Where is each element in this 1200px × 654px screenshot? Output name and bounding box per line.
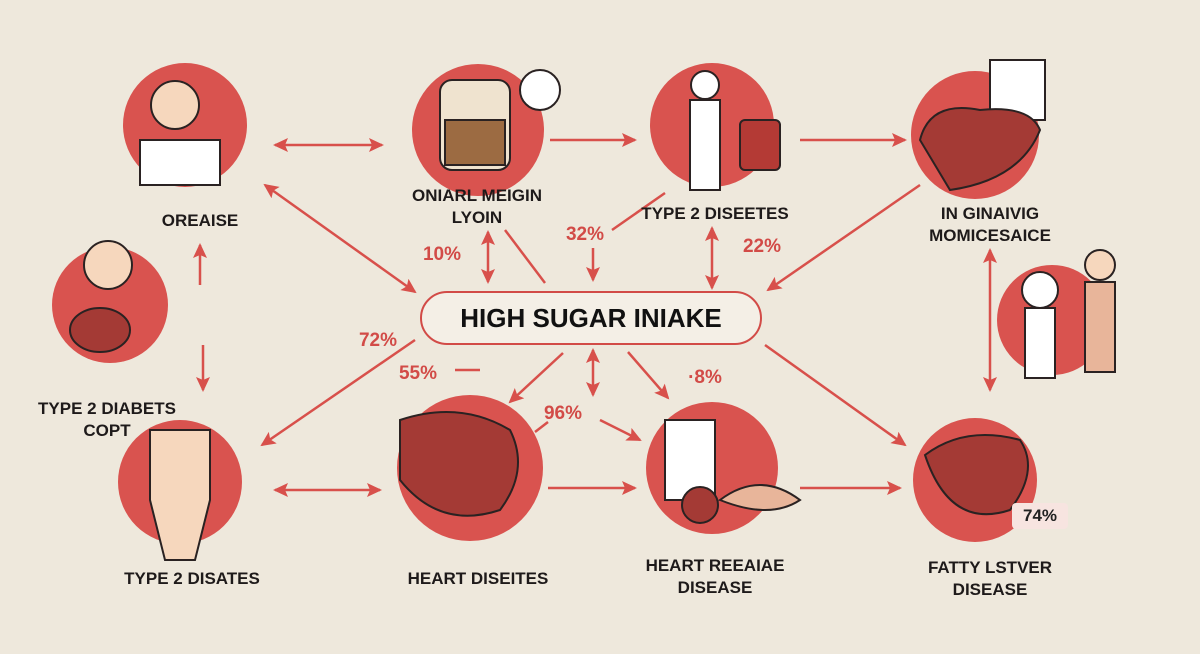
icon figures — [70, 60, 1115, 560]
text: FATTY LSTVER — [928, 558, 1052, 577]
text: 72% — [359, 330, 397, 351]
text: LYOIN — [452, 208, 502, 227]
percentages: 10% — [423, 244, 461, 265]
text: DISEASE — [678, 578, 752, 597]
arrows — [200, 140, 990, 490]
text: HEART DISEITES — [408, 569, 548, 588]
text: TYPE 2 DISEETES — [641, 204, 789, 223]
text: ONIARL MEIGIN — [412, 186, 542, 205]
text: 55% — [399, 363, 437, 384]
text: IN GINAIVIG — [941, 204, 1039, 223]
text: 32% — [566, 224, 604, 245]
center pill — [420, 291, 762, 345]
circles — [52, 63, 1107, 544]
text: HEART REEAIAE — [646, 556, 784, 575]
callout 74% — [1012, 503, 1068, 529]
callout 74%: 74% — [1023, 506, 1057, 525]
center pill: HIGH SUGAR INIAKE — [460, 303, 722, 333]
labels: OREAISE — [162, 211, 238, 230]
text: COPT — [83, 421, 131, 440]
text: 96% — [544, 403, 582, 424]
text: TYPE 2 DIABETS — [38, 399, 176, 418]
text: DISEASE — [953, 580, 1027, 599]
text: ·8% — [688, 367, 722, 388]
text: TYPE 2 DISATES — [124, 569, 260, 588]
text: 22% — [743, 236, 781, 257]
text: MOMICESAICE — [929, 226, 1051, 245]
